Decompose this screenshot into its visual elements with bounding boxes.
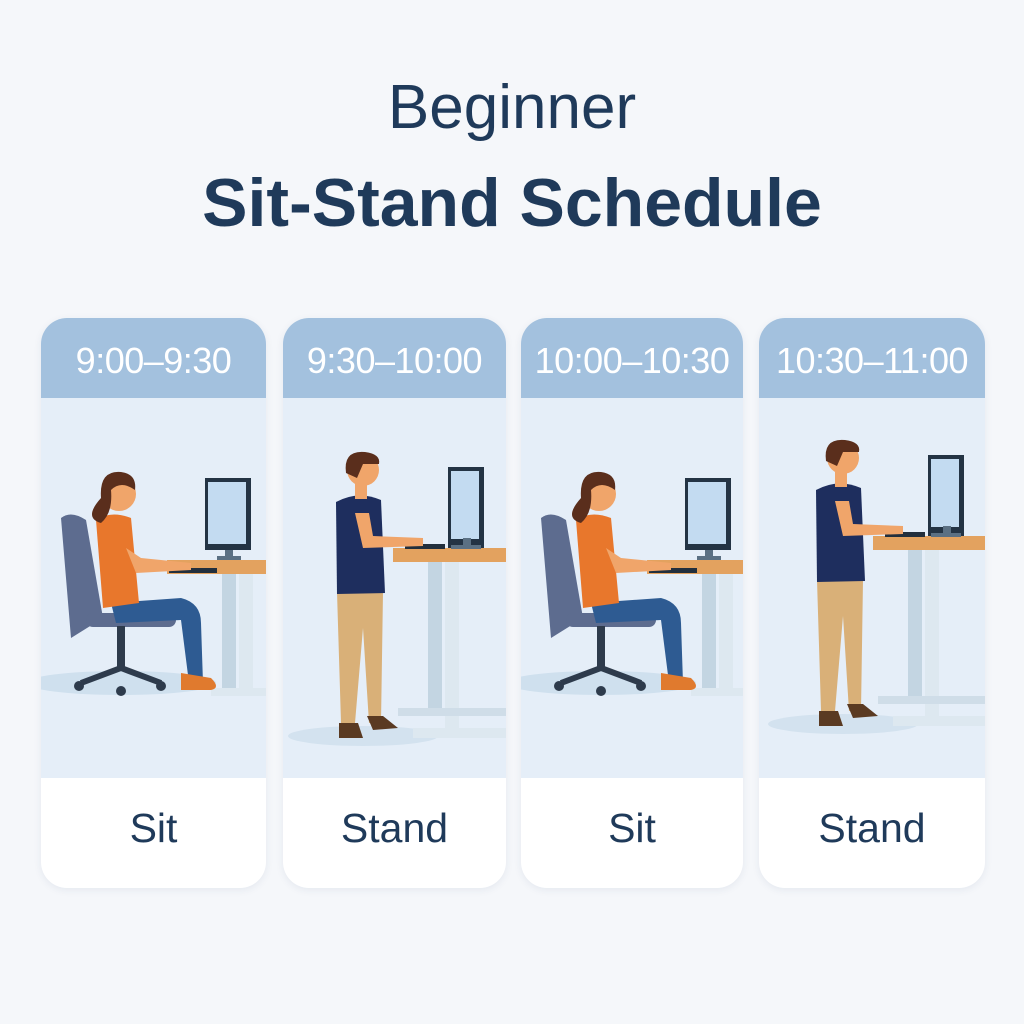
label: Sit xyxy=(130,805,177,851)
panel: 10:00-10:30 sit xyxy=(521,318,743,888)
header time xyxy=(759,318,985,398)
title: Beginner: Beginner xyxy=(388,73,636,142)
header time xyxy=(521,318,743,398)
header time: 9:00–9:30 xyxy=(76,340,231,381)
panel: 9:30-10:00 stand xyxy=(283,318,506,888)
title: Sit-Stand Schedule: Sit-Stand Schedule xyxy=(202,165,822,241)
header time xyxy=(283,318,506,398)
illustration: standing man at desk xyxy=(759,398,985,778)
illustration: standing man at desk xyxy=(283,398,506,778)
header time: 9:30–10:00 xyxy=(307,340,482,381)
panel: 9:00-9:30 sit xyxy=(41,318,266,888)
label: Sit xyxy=(608,805,656,851)
label: Stand xyxy=(341,805,448,851)
header time: 10:30–11:00 xyxy=(776,340,968,381)
panel: 10:30-11:00 stand xyxy=(759,318,985,888)
illustration: sitting woman at desk xyxy=(521,398,743,778)
illustration: sitting woman at desk xyxy=(41,398,266,778)
header time xyxy=(41,318,266,398)
label: Stand xyxy=(818,805,926,851)
header time: 10:00–10:30 xyxy=(535,340,729,381)
